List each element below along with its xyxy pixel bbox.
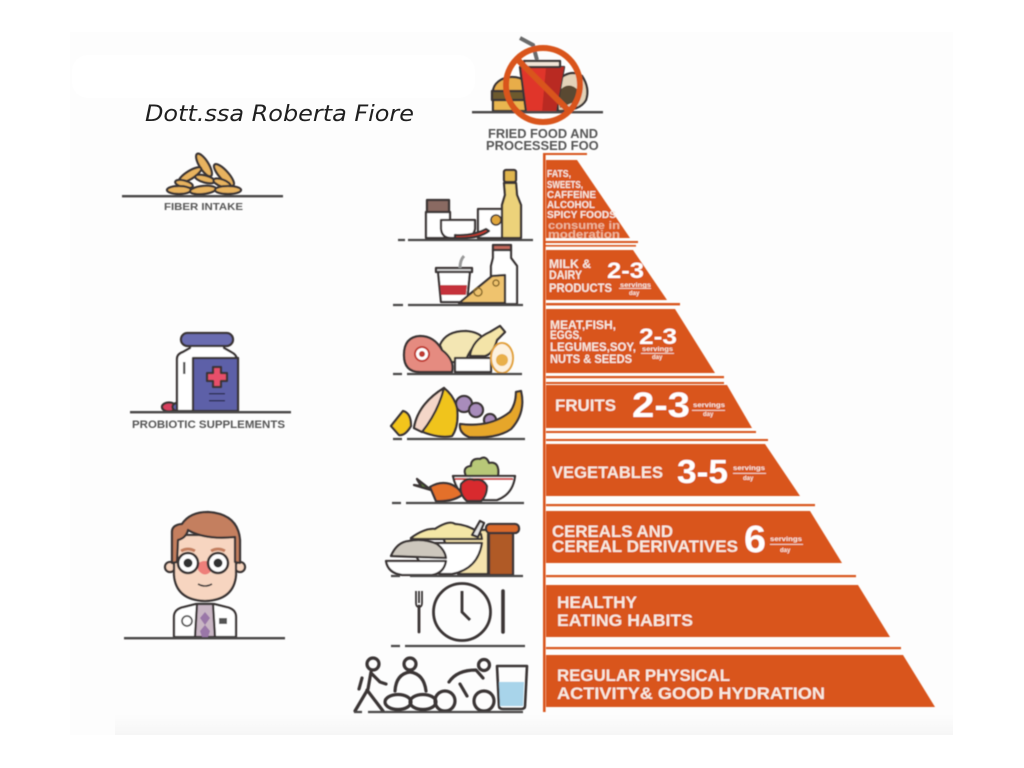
pyramid band: physical activity and hydration: ACTIVITY& GOOD HYDRATION: [557, 685, 825, 703]
pyramid spine: [543, 153, 546, 712]
pyramid band: milk and dairy: 2-3: [607, 258, 644, 283]
pyramid band: meat, fish, eggs: 2-3: [639, 324, 677, 349]
icon: cereals and bread: [386, 521, 519, 575]
icon: fruits: [391, 388, 522, 437]
pyramid band: fruits: FRUITS: [555, 397, 616, 415]
pyramid band: milk and dairy: servings: [620, 283, 652, 289]
shelf 4: [393, 438, 525, 440]
title: author name: Dott.ssa Roberta Fiore: [145, 101, 414, 127]
pyramid band: cereals: servings: [770, 537, 803, 543]
pyramid band: meat, fish, eggs: LEGUMES,SOY,: [550, 342, 636, 354]
pyramid band: cereals: CEREALS AND: [552, 523, 673, 541]
pyramid band: milk and dairy: [546, 250, 680, 305]
label: fried food: [486, 128, 599, 151]
icon: grains: [167, 152, 241, 195]
icon: vegetables: [414, 458, 515, 501]
shelf 8: [354, 711, 523, 713]
pyramid band: healthy eating habits: EATING HABITS: [557, 612, 693, 630]
pyramid band: vegetables: 3-5: [677, 453, 728, 490]
shelf: fiber: [122, 195, 283, 197]
pyramid band: milk and dairy: MILK &: [549, 259, 591, 271]
shelf: doctor: [124, 637, 285, 639]
pyramid band: fruits: day: [703, 412, 714, 418]
shelf 6: [391, 575, 523, 577]
pyramid band: healthy eating habits: HEALTHY: [557, 594, 637, 612]
label: fiber intake: FIBER INTAKE: [164, 201, 243, 213]
pyramid band: meat, fish, eggs: day: [652, 355, 663, 361]
icon: probiotic bottle: [162, 333, 238, 412]
background panel: [70, 32, 953, 735]
shelf 5: [392, 502, 524, 504]
white name banner: [72, 55, 475, 98]
shelf 7: [391, 645, 525, 647]
pyramid band: cereals: CEREAL DERIVATIVES: [552, 538, 738, 556]
icon: physical activity and water: [355, 658, 527, 711]
label: fried food: PROCESSED FOOD: [486, 139, 608, 153]
pyramid band: fruits: 2-3: [632, 386, 690, 425]
pyramid band: meat, fish, eggs: EGGS,: [550, 330, 582, 342]
icon: no fried food: [472, 38, 603, 122]
icon: dairy: [436, 245, 517, 304]
icon: clock with fork and knife: [416, 584, 503, 640]
icon: fats, sweets, drinks: [426, 170, 521, 238]
pyramid band: vegetables: VEGETABLES: [552, 464, 663, 482]
pyramid band: fats and sweets: [544, 153, 638, 247]
pyramid band: meat, fish, eggs: [546, 309, 724, 384]
pyramid band: meat, fish, eggs: servings: [642, 347, 674, 353]
pyramid band: physical activity and hydration: REGULAR PHYSICAL: [557, 667, 730, 685]
pyramid band: cereals: [546, 511, 856, 577]
pyramid band: vegetables: day: [743, 476, 754, 482]
pyramid band: fats and sweets: consume in: [548, 220, 620, 232]
pyramid band: milk and dairy: day: [629, 291, 640, 297]
shelf 2: [393, 304, 523, 306]
pyramid band: physical activity and hydration: [546, 655, 935, 707]
pyramid band: milk and dairy: PRODUCTS: [549, 283, 612, 295]
pyramid band: milk and dairy: DAIRY: [549, 270, 582, 282]
pyramid band: healthy eating habits: [546, 585, 901, 649]
pyramid band: fats and sweets: SPICY FOODS: [547, 209, 616, 221]
pyramid band: fats and sweets: moderation: [548, 229, 620, 241]
label: fried food: FRIED FOOD AND: [488, 127, 598, 141]
label: probiotic supplements: PROBIOTIC SUPPLEMENTS: [132, 419, 285, 431]
pyramid band: fats and sweets: CAFFEINE: [547, 189, 596, 201]
pyramid band: cereals: 6: [744, 519, 766, 561]
pyramid band: fruits: servings: [693, 403, 726, 409]
shelf 1: [398, 239, 533, 241]
pyramid band: vegetables: servings: [733, 466, 766, 472]
pyramid band: fruits: [546, 385, 768, 441]
pyramid band: cereals: day: [780, 548, 791, 554]
pyramid band: fats and sweets: ALCOHOL: [547, 199, 596, 211]
icon: doctor: [165, 512, 245, 637]
shelf 3: [393, 373, 522, 375]
pyramid band: fats and sweets: FATS,: [547, 168, 571, 180]
pyramid band: vegetables: [546, 444, 815, 506]
pyramid band: fats and sweets: SWEETS,: [547, 179, 583, 191]
icon: meat, eggs: [404, 326, 513, 373]
pyramid band: meat, fish, eggs: NUTS & SEEDS: [550, 354, 632, 366]
shelf: probiotics: [130, 411, 291, 413]
pyramid band: meat, fish, eggs: MEAT,FISH,: [550, 320, 616, 332]
